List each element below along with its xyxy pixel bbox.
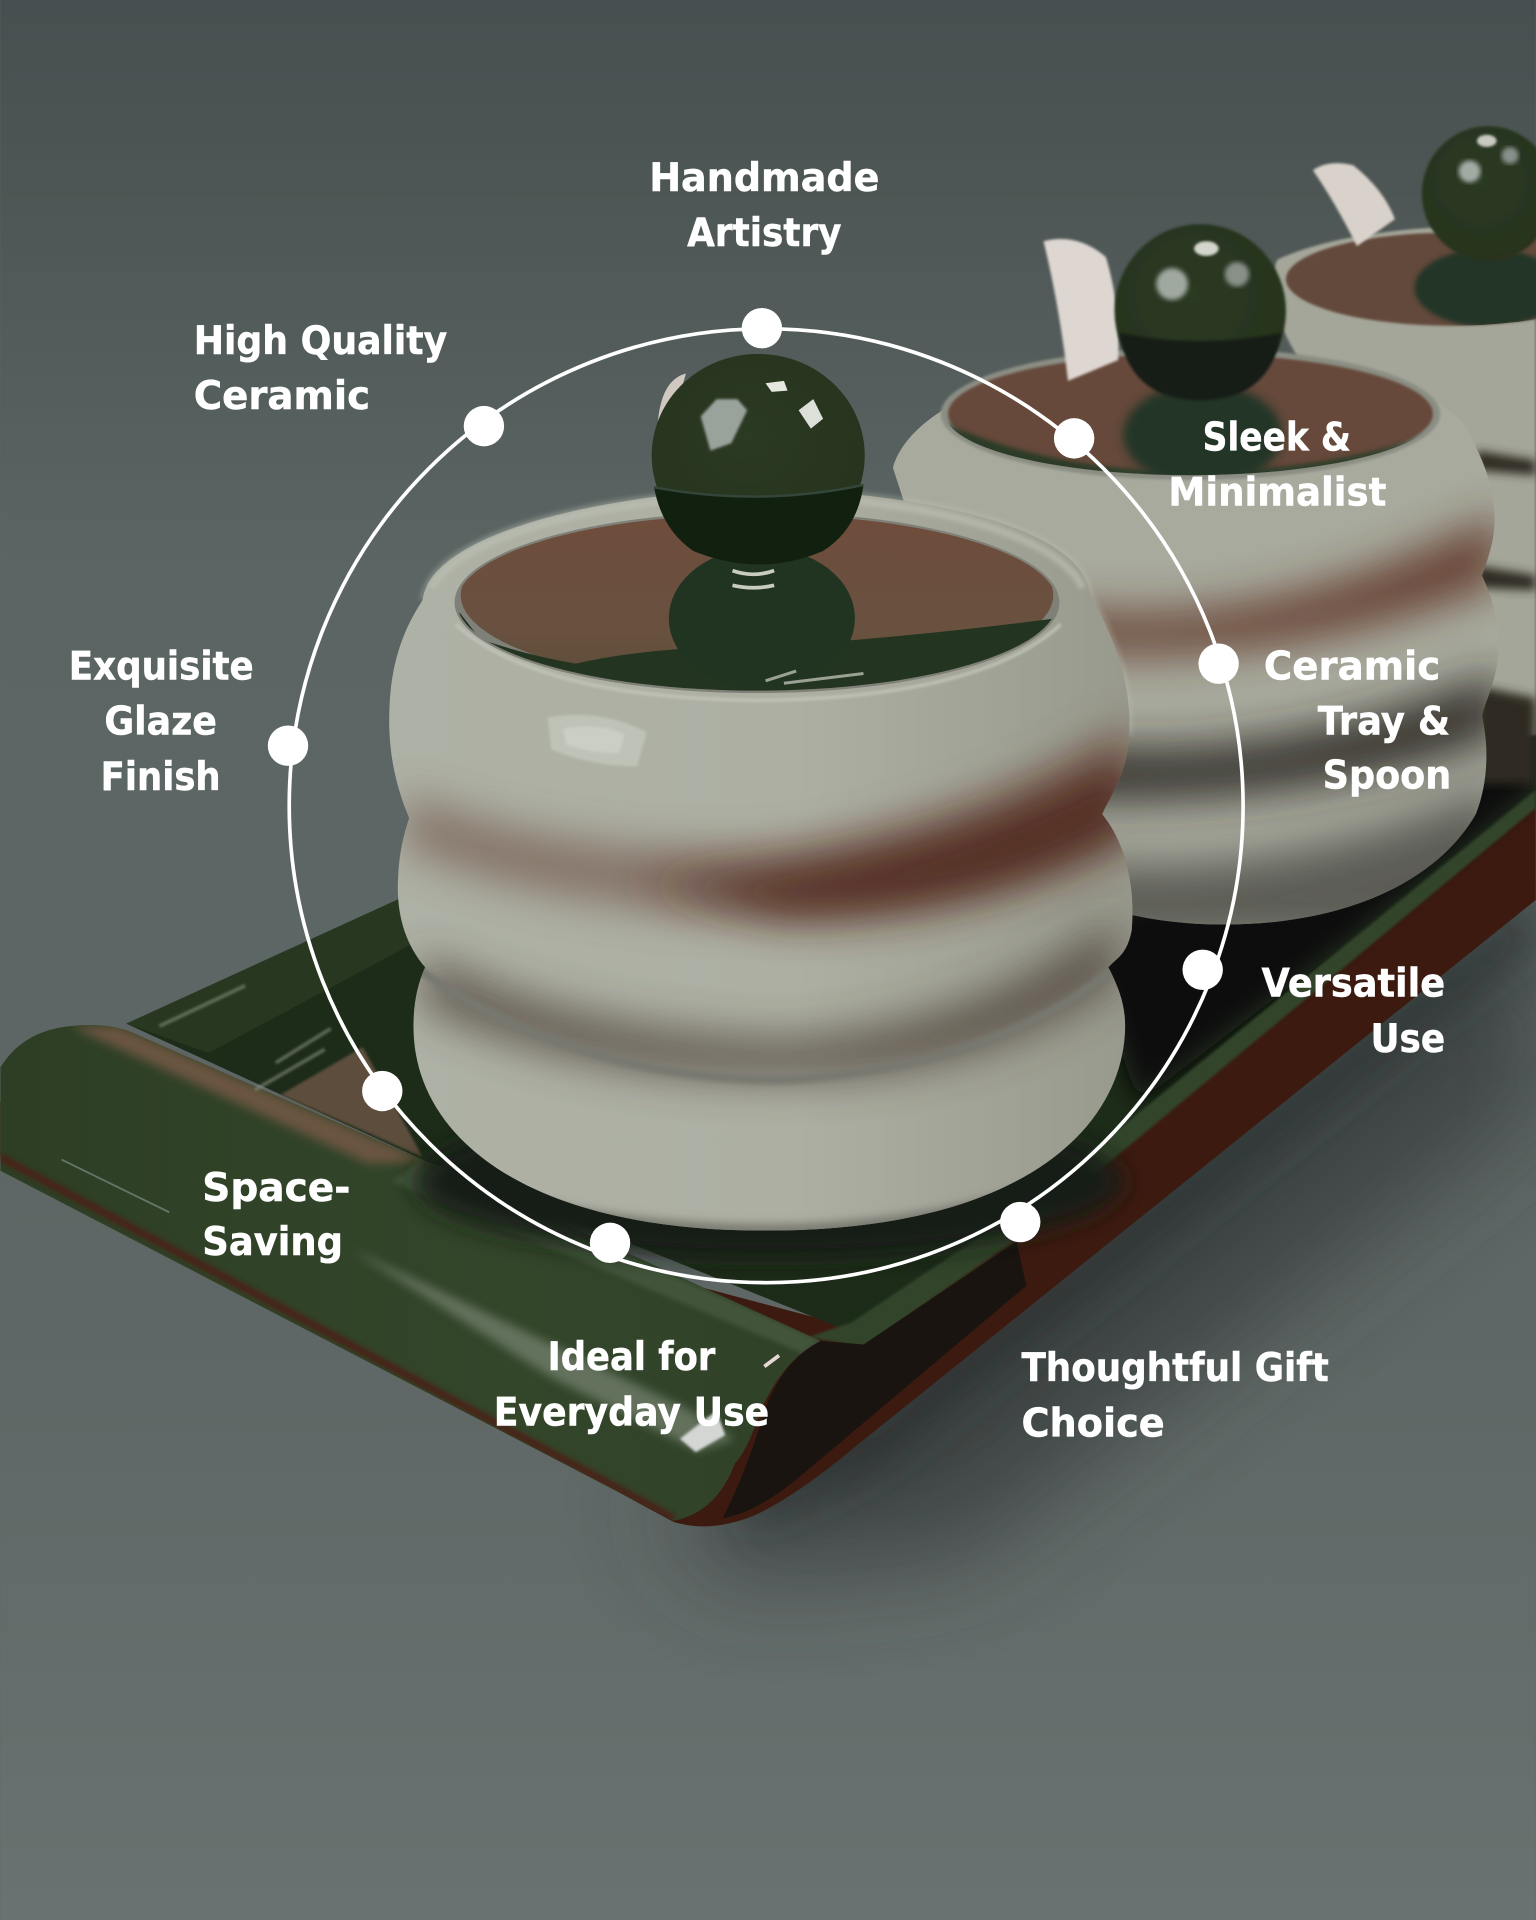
lid [948, 354, 1433, 474]
label: High Quality Ceramic: Ceramic [194, 374, 370, 419]
label: Ideal for Everyday Use: Ideal for [548, 1335, 716, 1380]
label: Thoughtful Gift Choice: Choice [1021, 1401, 1165, 1446]
top bulge pale veil [404, 722, 1133, 912]
tray floor [126, 735, 1536, 1335]
bottom edge shade [466, 1169, 1078, 1237]
reflected stem [732, 571, 774, 588]
feature ring [289, 329, 1243, 1283]
label: Sleek and Minimalist: Minimalist [1168, 471, 1386, 516]
lip brown band [70, 1026, 428, 1163]
jar lid reflection [1415, 249, 1536, 327]
jar base shadow [414, 1106, 1124, 1258]
spoon [1313, 163, 1395, 246]
tray back edge [126, 899, 414, 1053]
knob highlights [1156, 268, 1188, 300]
label: Exquisite Glaze Finish: Exquisite [69, 645, 254, 690]
label: Space-Saving: Saving [202, 1220, 343, 1265]
label: Space-Saving: Space- [202, 1166, 350, 1211]
lip gloss [350, 1249, 735, 1451]
knob highlights [701, 399, 747, 451]
lip thin highlight [61, 1160, 169, 1212]
label: Exquisite Glaze Finish: Glaze [104, 700, 217, 745]
knob [652, 354, 865, 557]
label: Thoughtful Gift Choice: Thoughtful Gift [1021, 1346, 1329, 1391]
label: Ceramic Tray and Spoon: Spoon [1323, 754, 1451, 799]
label: Handmade Artistry [649, 156, 879, 256]
knob highlights [1459, 160, 1481, 182]
rim inner [455, 512, 1059, 693]
label: Ceramic Tray and Spoon: Ceramic [1264, 645, 1440, 690]
lip gloss core [680, 1411, 725, 1452]
label: Sleek and Minimalist [1168, 416, 1386, 516]
lid green lower [459, 612, 1059, 698]
spoon [1044, 239, 1119, 381]
corner sparkle [764, 1356, 779, 1367]
knob seam [654, 485, 864, 497]
upper band shadow [1041, 514, 1500, 654]
label: Exquisite Glaze Finish [69, 645, 254, 800]
knob lower [654, 485, 864, 564]
lip reddish lower edge [0, 1157, 674, 1518]
label: Space-Saving [202, 1166, 350, 1265]
label: High Quality Ceramic [194, 319, 447, 419]
jar body [893, 410, 1498, 924]
lower band shadow [1017, 673, 1500, 799]
label: Versatile Use: Versatile [1261, 962, 1445, 1007]
third jar [1273, 126, 1536, 784]
second jar [882, 224, 1519, 943]
jar body [1273, 226, 1536, 735]
label: Versatile Use: Use [1370, 1017, 1445, 1062]
rim back top [431, 496, 1083, 588]
tray shadow [637, 888, 1536, 1580]
dark floor under back jars [1078, 722, 1536, 1102]
lid green [948, 388, 1422, 476]
label: Handmade Artistry: Handmade [649, 156, 879, 201]
tray inner gloss [159, 986, 331, 1090]
tray rim underside [0, 802, 1536, 1526]
label: Ceramic Tray and Spoon [1264, 645, 1451, 799]
body gloss [548, 715, 647, 767]
lid [459, 504, 1059, 698]
top bulge red shade [637, 747, 1133, 918]
jar halo [423, 490, 1129, 735]
lower band shade [423, 918, 1117, 1078]
jar body [380, 484, 1139, 1237]
label: Ideal for Everyday Use [494, 1335, 769, 1435]
label: Thoughtful Gift Choice [1021, 1346, 1329, 1446]
jar lower bands [1476, 451, 1536, 784]
label: Sleek and Minimalist: Sleek & [1203, 416, 1351, 461]
lip inner ridge [392, 1163, 821, 1353]
label: Handmade Artistry: Artistry [687, 211, 841, 256]
tray right wall [808, 790, 1536, 1347]
lower seam [419, 970, 1112, 1080]
jar lid [1286, 233, 1536, 326]
label: Ideal for Everyday Use: Everyday Use [494, 1390, 769, 1435]
label: Exquisite Glaze Finish: Finish [101, 755, 221, 800]
rim inner [941, 348, 1440, 480]
front jar [380, 354, 1139, 1258]
tray corner [723, 1242, 1026, 1518]
base shadow [1117, 770, 1486, 924]
knob base [1119, 333, 1281, 400]
label: Versatile Use [1261, 962, 1445, 1062]
spoon peek [658, 373, 686, 422]
knob reflection [669, 547, 855, 689]
lid gloss [766, 671, 864, 683]
ring markers [268, 308, 1239, 1263]
label: Ceramic Tray and Spoon: Tray & [1318, 700, 1450, 745]
ceramic tray [0, 722, 1536, 1531]
tray front lip [0, 1004, 857, 1531]
knob [1422, 126, 1536, 261]
label: High Quality Ceramic: High Quality [194, 319, 447, 364]
knob [1115, 224, 1286, 398]
tray floor reflection [281, 1047, 423, 1157]
rim front edge [456, 624, 1061, 700]
